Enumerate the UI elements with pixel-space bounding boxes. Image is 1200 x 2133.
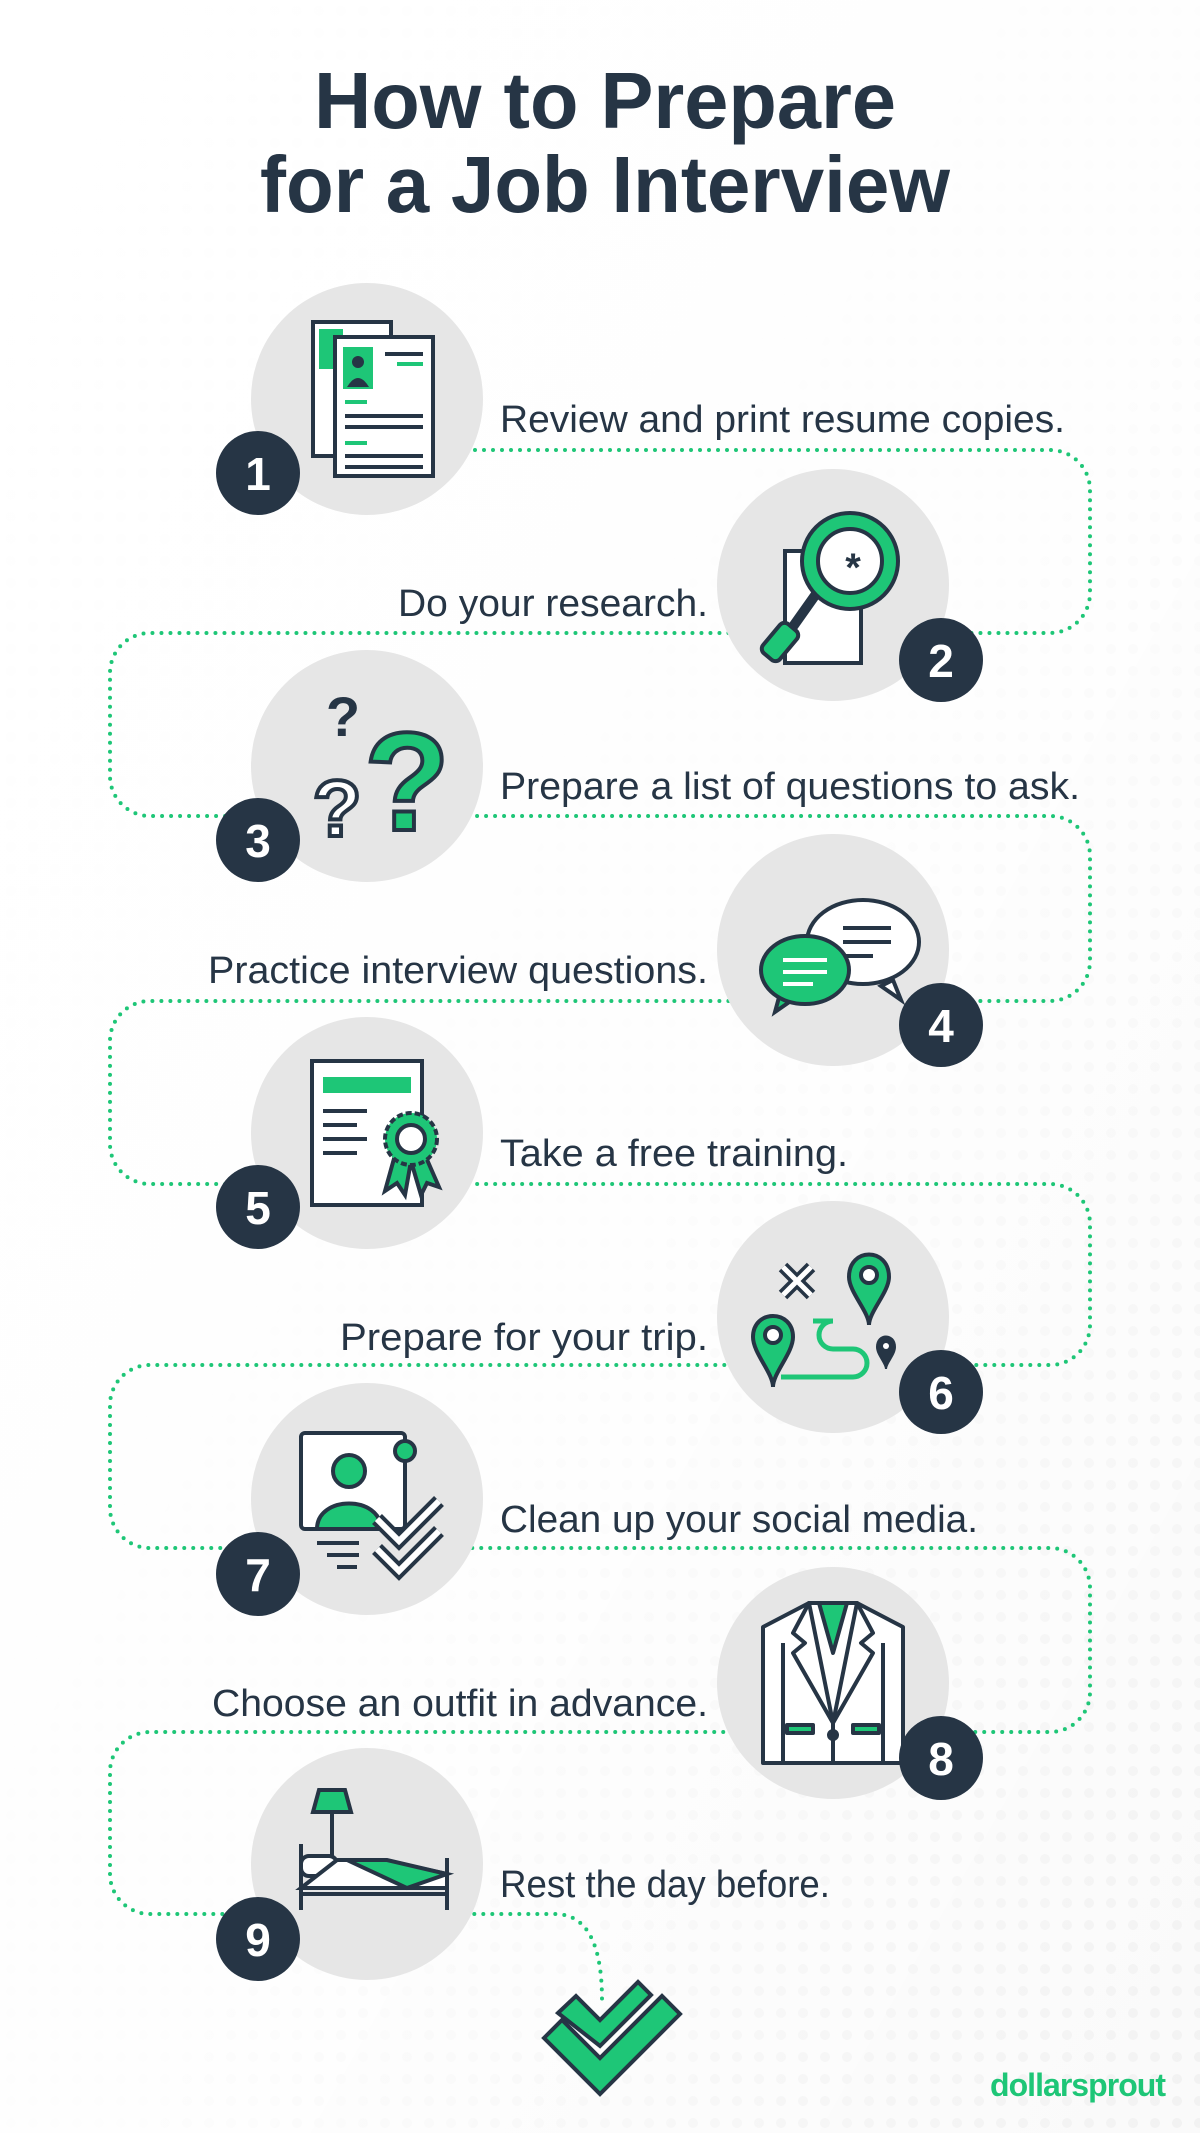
title: How to Prepare (314, 56, 896, 145)
badge 7 (216, 1532, 300, 1616)
step 2 (398, 469, 983, 702)
icon: magnifier over document (759, 513, 898, 664)
logo: dollarsprout: dollarsprout (990, 2067, 1166, 2103)
text 3: Prepare a list of questions to ask. (500, 766, 1080, 808)
step 9 (216, 1748, 830, 1981)
text 5: Take a free training. (500, 1133, 848, 1175)
icon: map route pins (753, 1254, 895, 1387)
text 1: Review and print resume copies. (500, 399, 1065, 441)
text 6: Prepare for your trip. (340, 1317, 708, 1359)
icon: resume copies (313, 322, 433, 476)
icon: speech bubbles (761, 900, 919, 1012)
badge 8: 8 (928, 1733, 954, 1785)
text 7: Clean up your social media. (500, 1499, 978, 1541)
badge 9: 9 (245, 1914, 271, 1966)
badge 4: 4 (928, 1000, 954, 1052)
badge 1: 1 (245, 448, 271, 500)
badge 3 (216, 798, 300, 882)
badge 1 (216, 431, 300, 515)
icon: question marks (313, 685, 450, 860)
badge 2 (899, 618, 983, 702)
title: for a Job Interview (260, 140, 951, 229)
step 8 (212, 1567, 983, 1800)
icon: bed with lamp (301, 1790, 447, 1910)
step 5 (216, 1017, 848, 1249)
step 1 (216, 283, 1065, 515)
text 4: Practice interview questions. (208, 950, 708, 992)
step 3 (216, 650, 1080, 882)
title (260, 56, 951, 229)
badge 6: 6 (928, 1367, 954, 1419)
dotted path connector (110, 450, 1090, 2000)
badge 5: 5 (245, 1182, 271, 1234)
badge 7: 7 (245, 1549, 271, 1601)
icon: profile with checks (301, 1433, 439, 1571)
badge 5 (216, 1165, 300, 1249)
step 4 (208, 834, 983, 1067)
icon: question marks: ? (364, 703, 450, 860)
icon: question marks: ? (313, 764, 361, 853)
step 6 (340, 1201, 983, 1434)
icon: certificate (312, 1061, 439, 1205)
badge 8 (899, 1716, 983, 1800)
badge 6 (899, 1350, 983, 1434)
icon: jacket (763, 1603, 903, 1763)
badge 3: 3 (245, 815, 271, 867)
step 7 (216, 1383, 978, 1616)
text 8: Choose an outfit in advance. (212, 1683, 708, 1725)
icon: magnifier over document: * (845, 546, 861, 590)
text 9: Rest the day before. (500, 1864, 830, 1906)
text 2: Do your research. (398, 583, 708, 625)
icon: final double check mark (544, 1982, 680, 2094)
badge 4 (899, 983, 983, 1067)
badge 9 (216, 1897, 300, 1981)
icon: question marks: ? (326, 685, 360, 748)
badge 2: 2 (928, 635, 954, 687)
